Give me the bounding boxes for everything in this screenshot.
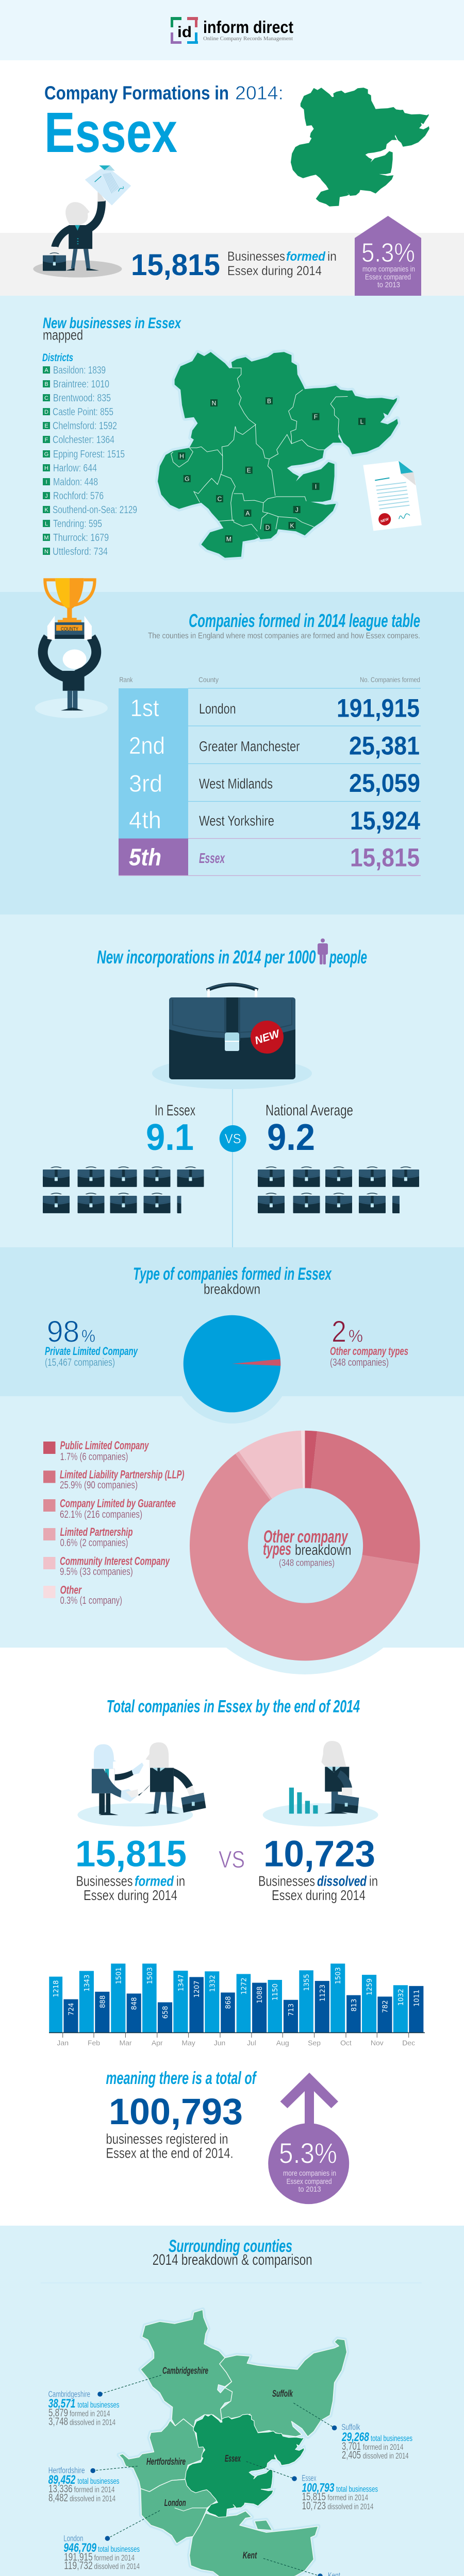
bar chart: monthly formed and dissolved: 1011	[413, 1990, 421, 2007]
stats: Suffolk: 2,405	[342, 2449, 361, 2461]
legend: districts: B	[44, 381, 48, 387]
table: companies formed league: Greater Manchester	[199, 738, 300, 754]
stats: Suffolk: dissolved in 2014	[363, 2452, 409, 2461]
legend: districts: Districts	[42, 352, 73, 364]
map: Essex districts	[158, 352, 398, 558]
stat: 2% other company types: (348 companies)	[330, 1357, 389, 1368]
heading: Type of companies formed in Essex breakdown: Type of companies formed in Essex	[133, 1264, 332, 1284]
legend: company types: 25.9% (90 companies)	[60, 1480, 138, 1491]
bar chart: monthly formed and dissolved: 1207	[193, 1980, 201, 1997]
comparison: Essex vs national average 9.1 vs 9.2	[146, 1102, 353, 1158]
stat: 10,723 businesses dissolved: Essex during 2014	[272, 1887, 366, 1903]
stat: 15,815 businesses formed vs: formed	[135, 1873, 174, 1889]
heading: Companies formed in 2014 league table: The counties in England where most companies are formed and how Essex compares.	[148, 632, 420, 640]
map: Essex districts: L	[360, 418, 364, 426]
bar chart: monthly formed and dissolved: 1259	[366, 1978, 374, 1995]
table: companies formed league: 191,915	[337, 693, 420, 722]
callout: arrow up 5.3% more companies: to 2013	[299, 2185, 321, 2194]
stats: Hertfordshire: 13,336	[48, 2483, 73, 2495]
comparison: Essex vs national average 9.1 vs 9.2: In Essex	[155, 1102, 195, 1119]
bar chart: monthly formed and dissolved: 813	[351, 1999, 358, 2011]
legend: districts: F	[45, 437, 48, 443]
stat: 10,723 businesses dissolved: dissolved	[317, 1873, 367, 1889]
label: vs: VS	[219, 1846, 245, 1873]
map: surrounding counties: Kent	[243, 2550, 257, 2561]
legend: districts: Basildon: 1839	[53, 365, 106, 376]
table: companies formed league: 1st	[130, 694, 159, 721]
bar chart: monthly formed and dissolved: Aug	[276, 2039, 289, 2047]
pictogram: 9.1 briefcases in Essex	[43, 1167, 204, 1213]
map: Essex districts: G	[185, 475, 189, 482]
stats: Cambridgeshire: 5,879	[48, 2407, 68, 2419]
legend: company types: Public Limited Company	[60, 1439, 150, 1452]
stats: Essex: total businesses	[336, 2485, 378, 2494]
stats: Essex: 100,793	[302, 2481, 335, 2495]
donut chart: other company types breakdown: types	[263, 1539, 291, 1559]
stats: Cambridgeshire: dissolved in 2014	[70, 2418, 115, 2427]
stat: 15,815 businesses formed vs: in	[176, 1873, 185, 1889]
heading: New businesses in Essex mapped	[43, 315, 181, 343]
legend: districts: E	[44, 423, 48, 429]
bar chart: monthly formed and dissolved: 888	[99, 1995, 107, 2008]
legend: districts: L	[45, 521, 48, 527]
map: Essex districts: E	[247, 467, 251, 474]
table: companies formed league: 5th	[129, 844, 161, 871]
legend: company types: Company Limited by Guarantee	[60, 1497, 176, 1510]
comparison: Essex vs national average 9.1 vs 9.2: VS	[225, 1131, 241, 1146]
heading: Surrounding counties: Surrounding counties	[169, 2236, 292, 2256]
stat: total of 100,793 businesses: Essex at the end of 2014.	[106, 2145, 233, 2161]
legend: company types: 62.1% (216 companies)	[60, 1509, 142, 1520]
stat: 10,723 businesses dissolved: in	[369, 1873, 378, 1889]
stat: 2% other company types: Other company types	[330, 1345, 408, 1358]
stat: 15,815 businesses formed vs: Essex during 2014	[84, 1887, 177, 1903]
callout: 5.3% house badge	[355, 216, 421, 296]
bar chart: monthly formed and dissolved: May	[181, 2039, 195, 2047]
comparison: Essex vs national average 9.1 vs 9.2: 9.2	[267, 1117, 315, 1158]
legend: company types: Limited Liability Partnership (LLP)	[60, 1468, 185, 1481]
map: surrounding counties	[90, 2310, 347, 2576]
legend: districts: D	[44, 409, 48, 415]
stats: London: formed in 2014	[94, 2554, 135, 2563]
stats: London	[63, 2533, 140, 2572]
bar chart: monthly formed and dissolved: Oct	[340, 2039, 352, 2047]
bar chart: monthly formed and dissolved: Feb	[88, 2039, 100, 2047]
bar chart: monthly formed and dissolved: 1355	[303, 1974, 311, 1991]
stats: London: dissolved in 2014	[94, 2563, 140, 2571]
bar chart: monthly formed and dissolved: Jan	[57, 2039, 69, 2047]
map: Essex districts: D	[266, 524, 270, 531]
comparison: Essex vs national average 9.1 vs 9.2: 9.1	[146, 1117, 194, 1158]
stat: 98% private limited company: %	[81, 1326, 95, 1346]
stats: Hertfordshire: formed in 2014	[74, 2485, 115, 2494]
stat: 98% private limited company: (15,467 companies)	[45, 1357, 115, 1368]
legend: districts: Epping Forest: 1515	[53, 449, 125, 460]
table: companies formed league: Essex	[199, 850, 225, 866]
bar chart: monthly formed and dissolved: Apr	[152, 2039, 163, 2047]
map: surrounding counties: London	[164, 2498, 186, 2508]
table: companies formed league: London	[199, 701, 236, 717]
table: companies formed league: Rank	[120, 675, 133, 684]
bar chart: monthly formed and dissolved: 1218	[53, 1980, 60, 1997]
stats: Suffolk: 3,701	[342, 2441, 361, 2452]
heading: Type of companies formed in Essex breakdown: breakdown	[204, 1281, 260, 1297]
legend: districts: Rochford: 576	[53, 490, 104, 502]
table: companies formed league: 4th	[129, 807, 161, 834]
stats: Cambridgeshire: formed in 2014	[70, 2410, 110, 2418]
callout: arrow up 5.3% more companies: 5.3%	[279, 2137, 337, 2169]
stats: Hertfordshire: Hertfordshire	[48, 2466, 85, 2476]
stats: Essex	[302, 2473, 378, 2512]
stats: Essex: dissolved in 2014	[327, 2503, 373, 2512]
callout: arrow up 5.3% more companies: more companies in	[283, 2169, 336, 2178]
callout: arrow up 5.3% more companies: Essex compared	[287, 2177, 332, 2186]
stats: London: total businesses	[98, 2545, 140, 2554]
callout: 5.3% house badge: Essex compared	[365, 273, 411, 281]
legend: districts: M	[44, 535, 49, 541]
table: companies formed league: No. Companies formed	[360, 675, 420, 684]
stat: 10,723 businesses dissolved: 10,723	[263, 1834, 375, 1875]
donut chart: other company types breakdown: Other company	[263, 1527, 349, 1547]
stats: Hertfordshire	[48, 2466, 119, 2504]
heading: New businesses in Essex mapped: New businesses in Essex	[43, 315, 181, 332]
illustration: two businessmen shaking hands	[77, 1742, 206, 1826]
illustration: businessman with declining bar chart	[263, 1741, 378, 1826]
stats: London: London	[63, 2533, 83, 2543]
stat: 2% other company types	[330, 1315, 408, 1368]
map: Essex outline	[291, 88, 429, 207]
bar chart: monthly formed and dissolved: 848	[131, 1997, 139, 2010]
stat: 98% private limited company: 98	[47, 1315, 79, 1349]
icon: large briefcase with NEW sticker: NEW	[253, 1027, 282, 1047]
donut chart: other company types breakdown: (348 companies)	[279, 1558, 335, 1568]
map: Essex districts: M	[226, 536, 231, 543]
logo: inform direct header	[171, 17, 293, 44]
legend: districts: Tendring: 595	[53, 518, 102, 530]
table: companies formed league: 25,059	[349, 769, 420, 798]
stat: 10,723 businesses dissolved: Businesses	[258, 1873, 315, 1889]
legend: company types: 1.7% (6 companies)	[60, 1451, 128, 1463]
title: Essex: Essex	[44, 101, 177, 164]
bar chart: monthly formed and dissolved: 782	[382, 2000, 390, 2013]
legend: company types	[43, 1439, 185, 1606]
illustration: businessman holding document	[33, 165, 131, 278]
stats: Essex: 15,815	[302, 2491, 326, 2503]
legend: districts: A	[44, 367, 48, 374]
stat: total of 100,793 businesses	[106, 2069, 257, 2161]
map: Essex districts: B	[267, 398, 271, 405]
heading: Type of companies formed in Essex breakdown	[133, 1264, 332, 1297]
logo: inform direct header: id	[177, 24, 192, 41]
stat: total of 100,793 businesses: meaning there is a total of	[106, 2069, 257, 2088]
stats: Cambridgeshire: 3,748	[48, 2416, 68, 2428]
icon: new company document	[363, 461, 422, 531]
legend: districts: Southend-on-Sea: 2129	[53, 504, 137, 516]
stat: 10,723 businesses dissolved	[258, 1834, 378, 1903]
stats: Suffolk: 29,268	[341, 2430, 369, 2444]
stats: Essex: 10,723	[302, 2500, 326, 2512]
bar chart: monthly formed and dissolved: 1501	[115, 1967, 123, 1984]
stat: 2% other company types: 2	[332, 1315, 346, 1349]
callout: arrow up 5.3% more companies	[268, 2073, 349, 2204]
bar chart: monthly formed and dissolved: Jun	[214, 2039, 225, 2047]
legend: districts: C	[44, 395, 48, 401]
heading: Surrounding counties: 2014 breakdown & comparison	[153, 2251, 312, 2268]
comparison: Essex vs national average 9.1 vs 9.2: National Average	[266, 1102, 353, 1119]
heading: New businesses in Essex mapped: mapped	[43, 327, 83, 343]
table: companies formed league: 25,381	[349, 732, 420, 760]
bar chart: monthly formed and dissolved: 658	[162, 2006, 170, 2019]
legend: company types: 0.6% (2 companies)	[60, 1537, 128, 1549]
bar chart: monthly formed and dissolved: 1032	[397, 1989, 405, 2006]
stats: Essex: formed in 2014	[327, 2494, 368, 2502]
bar chart: monthly formed and dissolved: 1088	[256, 1987, 264, 2004]
bar chart: monthly formed and dissolved: 1123	[319, 1985, 327, 2002]
callout: 5.3% house badge: more companies in	[362, 265, 415, 274]
pie chart: 98% private vs 2% other	[172, 1304, 292, 1423]
bar chart: monthly formed and dissolved: 868	[225, 1996, 233, 2009]
bar chart: monthly formed and dissolved: 1347	[177, 1974, 185, 1991]
bar chart: monthly formed and dissolved: Sep	[308, 2039, 321, 2047]
table: companies formed league: County	[198, 675, 219, 684]
legend: districts: N	[44, 549, 48, 555]
logo: inform direct header: inform direct	[203, 18, 293, 37]
legend: districts: Chelmsford: 1592	[53, 420, 117, 432]
stats: London: 946,709	[63, 2541, 96, 2555]
heading: New incorporations per 1000 people: people	[329, 946, 367, 968]
stat: total of 100,793 businesses: businesses registered in	[106, 2131, 228, 2147]
donut chart: other company types breakdown	[176, 1417, 434, 1674]
divider: comparison line	[232, 1089, 233, 1247]
callout: 5.3% house badge: 5.3%	[361, 238, 415, 268]
heading: Companies formed in 2014 league table	[148, 610, 420, 640]
icon: large briefcase with NEW sticker	[152, 984, 312, 1089]
stats: London: 119,732	[64, 2560, 93, 2572]
legend: company types: 0.3% (1 company)	[60, 1595, 122, 1606]
bar chart: monthly formed and dissolved: Jul	[247, 2039, 256, 2047]
map: surrounding counties: Suffolk	[272, 2388, 293, 2399]
table: companies formed league: 3rd	[129, 770, 162, 797]
stats: London: 191,915	[64, 2551, 93, 2563]
stats: Suffolk: Suffolk	[341, 2422, 360, 2432]
stats: Cambridgeshire: 38,571	[48, 2397, 75, 2411]
map: Essex districts: J	[295, 506, 299, 513]
table: companies formed league: 2nd	[129, 732, 165, 759]
table: companies formed league: 15,924	[350, 806, 420, 835]
stats: Hertfordshire: dissolved in 2014	[70, 2495, 115, 2503]
bar chart: monthly formed and dissolved: Mar	[119, 2039, 132, 2047]
stat: 15,815 businesses formed vs: 15,815	[75, 1834, 187, 1875]
donut chart: other company types breakdown: breakdown	[295, 1542, 352, 1558]
map: Essex districts: K	[290, 522, 294, 530]
legend: company types: 9.5% (33 companies)	[60, 1566, 133, 1578]
bar chart: monthly formed and dissolved: 1272	[240, 1977, 248, 1995]
stat: 15,815 businesses formed	[131, 248, 337, 282]
stat: total of 100,793 businesses: 100,793	[109, 2092, 243, 2132]
stats: Suffolk	[341, 2422, 412, 2461]
stats: Suffolk: total businesses	[371, 2434, 412, 2443]
table: companies formed league	[119, 675, 421, 876]
legend: districts: Uttlesford: 734	[53, 546, 108, 557]
legend: districts: Brentwood: 835	[53, 393, 111, 404]
map: Essex districts: I	[315, 483, 317, 490]
stat: 15,815 businesses formed: 15,815	[131, 248, 220, 282]
stats: Suffolk: formed in 2014	[363, 2443, 403, 2452]
title: Company Formations in 2014: 2014:	[235, 82, 284, 104]
legend: districts: K	[44, 507, 48, 513]
logo: inform direct header: Online Company Records Management	[203, 36, 293, 42]
stat: 15,815 businesses formed vs	[75, 1834, 187, 1903]
stats: Cambridgeshire: total businesses	[77, 2401, 119, 2410]
heading: New incorporations per 1000 people	[97, 939, 367, 968]
icon: new company document: NEW	[380, 517, 390, 523]
title: Company Formations in 2014: Company Formations in	[44, 82, 229, 104]
stats: Essex: Essex	[302, 2473, 317, 2483]
heading: New incorporations per 1000 people: New incorporations in 2014 per 1000	[97, 946, 316, 968]
legend: districts	[42, 352, 137, 557]
map: Essex districts: A	[245, 510, 250, 517]
stat: 98% private limited company: Private Limited Company	[45, 1345, 138, 1358]
bar chart: monthly formed and dissolved: Dec	[402, 2039, 415, 2047]
stat: 15,815 businesses formed: formed	[286, 249, 326, 264]
map: Essex districts: N	[212, 400, 216, 407]
bar chart: monthly formed and dissolved: 1343	[84, 1975, 91, 1992]
legend: districts: Colchester: 1364	[53, 434, 114, 446]
stats: Hertfordshire: total businesses	[77, 2477, 119, 2486]
heading: Surrounding counties	[41, 2236, 422, 2283]
pictogram: 9.2 briefcases national average	[258, 1167, 419, 1213]
legend: districts: Maldon: 448	[53, 477, 98, 488]
legend: districts: I	[45, 479, 47, 485]
map: surrounding counties: Cambridgeshire	[162, 2366, 208, 2376]
map: Essex districts: C	[218, 496, 222, 503]
map: surrounding counties: Essex	[225, 2453, 241, 2464]
legend: districts: G	[44, 451, 48, 457]
legend: districts: Harlow: 644	[53, 463, 97, 474]
stats: Cambridgeshire	[48, 2389, 119, 2428]
stat: 15,815 businesses formed: in	[327, 249, 337, 264]
stat: 15,815 businesses formed: Businesses	[227, 249, 285, 264]
legend: company types: Community Interest Company	[60, 1555, 170, 1567]
stat: 15,815 businesses formed vs: Businesses	[76, 1873, 133, 1889]
bar chart: monthly formed and dissolved: 1503	[335, 1967, 342, 1984]
legend: districts: Thurrock: 1679	[53, 532, 109, 544]
bar chart: monthly formed and dissolved: 724	[68, 2003, 75, 2015]
stats: Cambridgeshire: Cambridgeshire	[48, 2389, 90, 2399]
illustration: man holding county trophy	[35, 578, 108, 718]
map: Essex districts: F	[314, 413, 318, 420]
map: surrounding counties: Hertfordshire	[146, 2456, 186, 2467]
stats: Hertfordshire: 8,482	[48, 2492, 68, 2504]
bar chart: monthly formed and dissolved: 1332	[209, 1975, 217, 1992]
bar chart: monthly formed and dissolved: 1503	[146, 1967, 154, 1984]
legend: districts: Braintree: 1010	[53, 379, 109, 390]
legend: districts: Castle Point: 855	[53, 406, 113, 418]
stat: 15,815 businesses formed: Essex during 2014	[227, 264, 322, 278]
stat: 98% private limited company	[45, 1315, 138, 1368]
bar chart: monthly formed and dissolved: Nov	[371, 2039, 384, 2047]
stats: Hertfordshire: 89,452	[48, 2473, 76, 2487]
legend: districts: J	[45, 493, 48, 499]
table: companies formed league: 15,815	[350, 843, 420, 872]
stat: 2% other company types: %	[349, 1326, 363, 1346]
table: companies formed league: West Midlands	[199, 776, 273, 792]
map: Essex districts: H	[179, 452, 184, 460]
legend: company types: Other	[60, 1583, 82, 1596]
legend: districts: H	[44, 465, 48, 471]
bar chart: monthly formed and dissolved: 713	[288, 2004, 295, 2016]
table: companies formed league: West Yorkshire	[199, 813, 274, 829]
legend: company types: Limited Partnership	[60, 1526, 133, 1538]
bar chart: monthly formed and dissolved	[49, 1963, 425, 2047]
illustration: man holding county trophy: COUNTY	[61, 626, 78, 632]
bar chart: monthly formed and dissolved: 1150	[272, 1984, 279, 2001]
callout: 5.3% house badge: to 2013	[377, 280, 400, 290]
